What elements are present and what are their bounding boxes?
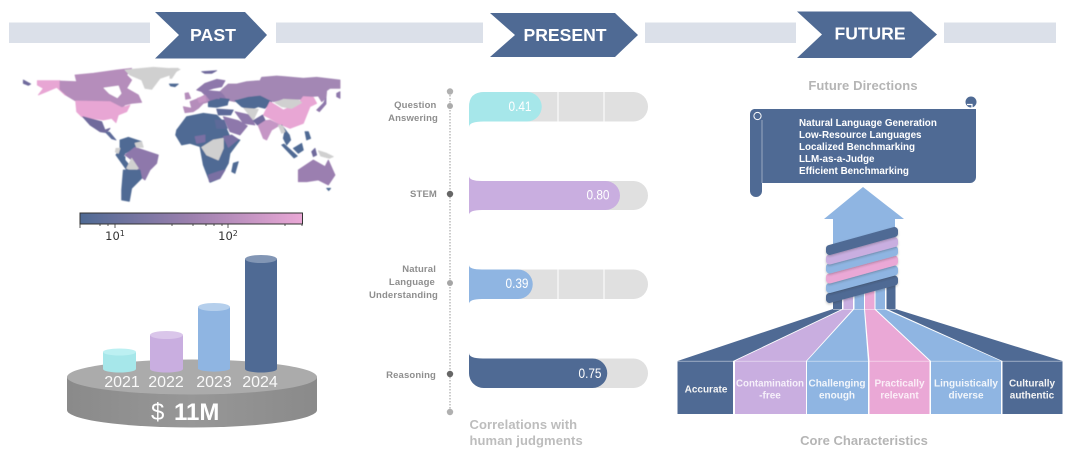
platform base: [67, 360, 317, 428]
year labels: 2022: [148, 374, 184, 391]
arrow: FUTURE: [797, 12, 937, 58]
bar: Natural Language Understanding: [469, 265, 648, 304]
timeline axis: [447, 88, 453, 415]
year labels: 2023: [196, 374, 232, 391]
fan: Contamination-free: -free: [759, 390, 781, 402]
world map: [23, 67, 340, 201]
year labels: [104, 374, 278, 391]
future directions list: Localized Benchmarking: [799, 142, 915, 153]
category labels: Answering: [388, 113, 438, 124]
category labels: Reasoning: [386, 370, 436, 381]
fan: Linguistically diverse: diverse: [948, 390, 984, 402]
year labels: 2021: [104, 374, 140, 391]
category labels: STEM: [410, 189, 437, 200]
bar: Question Answering: 0.41: [508, 98, 532, 114]
arrow: PRESENT: PRESENT: [524, 25, 607, 45]
bar: Reasoning: [469, 353, 648, 388]
category labels: Natural: [402, 264, 436, 275]
colorbar legend: 2: [233, 229, 238, 238]
fan: Culturally authentic: authentic: [1010, 390, 1055, 402]
chart caption: human judgments: [470, 433, 583, 448]
category labels: Question: [394, 100, 437, 111]
colorbar legend: 10: [105, 229, 120, 243]
future directions list: LLM-as-a-Judge: [799, 154, 875, 165]
bar: Natural Language Understanding: 0.39: [506, 275, 529, 291]
category labels: Language: [389, 277, 435, 288]
colorbar legend: 1: [120, 229, 125, 238]
cylinder 2021: [103, 348, 136, 372]
cylinder 2023: [198, 303, 230, 372]
category labels: [369, 100, 438, 381]
fan: Linguistically diverse: Linguistically: [934, 378, 998, 390]
heading: Future Directions: Future Directions: [808, 78, 918, 93]
platform with yearly cylinders: [67, 255, 317, 428]
fan: Culturally authentic: Culturally: [1009, 378, 1055, 390]
total amount label: $ 11M: [151, 399, 219, 426]
heading: Core Characteristics: Core Characteristics: [800, 433, 928, 448]
bar: Question Answering: [469, 92, 648, 127]
colorbar legend: 10: [218, 229, 233, 243]
bar: STEM: 0.80: [586, 186, 610, 202]
chart caption: Correlations with: [470, 417, 577, 432]
upward arrow: [824, 187, 904, 285]
fan: Contamination-free: [735, 309, 853, 414]
colorbar legend: [80, 213, 302, 243]
arrow: PAST: PAST: [190, 25, 236, 45]
fan: Challenging enough: Challenging: [808, 378, 866, 390]
pillar strands: [833, 285, 896, 310]
chart caption: [470, 417, 583, 448]
fan: Practically relevant: relevant: [880, 390, 919, 402]
fan: Accurate: Accurate: [685, 384, 728, 396]
fan: Accurate: [678, 309, 842, 414]
arrow: FUTURE: FUTURE: [834, 24, 906, 44]
year labels: 2024: [242, 374, 278, 391]
future directions list: Low-Resource Languages: [799, 130, 922, 141]
cylinder 2024: [245, 255, 277, 372]
fan: Practically relevant: [865, 309, 930, 414]
future directions list: Efficient Benchmarking: [799, 166, 909, 177]
bar: Reasoning: 0.75: [578, 365, 602, 381]
arrow: PRESENT: [490, 13, 638, 57]
twisted bands: [830, 230, 894, 300]
bar: STEM: [469, 176, 648, 215]
fan: Challenging enough: [807, 309, 868, 414]
future directions list: Natural Language Generation: [799, 118, 937, 129]
category labels: Understanding: [369, 290, 438, 301]
future directions list: [799, 118, 937, 177]
fan: Linguistically diverse: [876, 309, 1001, 414]
fan: Practically relevant: Practically: [874, 378, 925, 390]
fan: Culturally authentic: [887, 309, 1062, 414]
cylinder 2022: [150, 331, 183, 372]
fan: Challenging enough: enough: [819, 390, 855, 402]
arrow: PAST: [155, 12, 267, 58]
fan: Contamination-free: Contamination: [736, 378, 804, 390]
timeline header bars: [9, 22, 1056, 43]
scroll panel: [750, 96, 977, 197]
